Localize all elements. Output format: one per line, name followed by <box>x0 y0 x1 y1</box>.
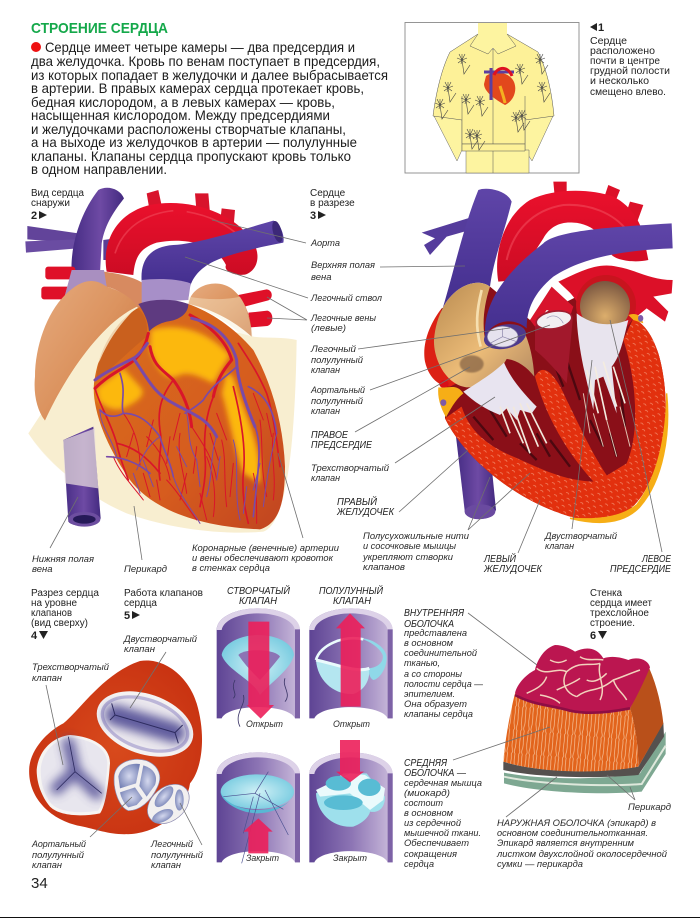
coronary veins <box>95 318 277 523</box>
text: inner layer: клапаны сердца <box>404 709 473 720</box>
labels of the heart figures: ПРЕДСЕРДИЕ <box>610 564 671 575</box>
caption 1: смещено влево. <box>590 87 666 98</box>
labels of figure 4: полулунный <box>32 850 85 861</box>
labels of the heart figures: вена <box>32 564 53 575</box>
labels of the heart figures: Трехстворчатый <box>311 463 390 474</box>
labels of the heart figures: Легочный ствол <box>310 293 383 304</box>
labels of the heart figures: Легочный <box>310 344 357 355</box>
yellow fat at left atrium <box>628 314 643 323</box>
labels of figure 4: клапан <box>124 644 156 655</box>
pulmonary trunk <box>141 220 284 303</box>
text: outer layer: сумки — перикарда <box>497 859 583 870</box>
intro text block: бедная кислородом, а в левых камерах — кровь, <box>31 94 335 110</box>
labels of the heart figures: Перикард <box>124 564 167 575</box>
figure 6: heart wall layers <box>503 645 666 793</box>
title: СТРОЕНИЕ СЕРДЦА <box>31 20 168 37</box>
superior vena cava <box>25 188 124 273</box>
labels of the heart figures: Аорта <box>310 238 340 249</box>
labels of the heart figures: ЖЕЛУДОЧЕК <box>336 507 395 518</box>
blood flow arrow down <box>247 622 274 719</box>
caption 6: трехслойное <box>590 608 649 619</box>
mini heart <box>484 68 515 105</box>
caption 4: Разрез сердца <box>31 588 99 599</box>
labels of figure 5: Открыт <box>333 719 370 730</box>
figure 3: heart in section <box>422 182 673 522</box>
labels of the heart figures: ЛЕВОЕ <box>641 554 671 565</box>
labels of the heart figures <box>32 238 671 575</box>
caption 2: 2 <box>31 210 37 222</box>
figure 2: heart outside view <box>25 188 297 533</box>
caption 4: (вид сверху) <box>31 618 88 629</box>
text: middle layer: Обеспечивает <box>404 838 469 849</box>
intro text block: в одном направлении. <box>31 161 167 177</box>
labels of the heart figures: Верхняя полая <box>311 260 375 271</box>
atrioventricular valve closed <box>217 752 300 863</box>
red bullet <box>31 42 41 52</box>
upper veins branches <box>422 217 473 255</box>
labels of the heart figures: Полусухожильные нити <box>363 531 470 542</box>
labels of the heart figures: Легочные вены <box>310 313 376 324</box>
epicardium gray layer <box>503 723 664 777</box>
caption 6: сердца имеет <box>590 598 652 609</box>
labels of figure 5 <box>227 584 384 864</box>
caption 1: 1 <box>598 22 604 34</box>
semilunar valve closed <box>309 740 393 862</box>
pericardium <box>28 307 297 533</box>
labels of the heart figures: ПРАВОЕ <box>311 430 348 441</box>
labels of the heart figures: Аортальный <box>310 385 366 396</box>
intro text block: клапаны. Клапаны сердца пропускают кровь только <box>31 148 351 164</box>
labels of the heart figures: (левые) <box>311 323 346 334</box>
caption 1: Сердце <box>590 36 627 47</box>
labels of the heart figures: ЖЕЛУДОЧЕК <box>483 564 543 575</box>
endocardium top <box>515 645 650 713</box>
yellow fat rim <box>570 393 668 522</box>
labels of the heart figures: клапан <box>311 365 341 376</box>
labels of figure 4: клапан <box>32 860 63 871</box>
pericardium translucent lobe <box>28 307 137 485</box>
caption 6 <box>590 588 652 642</box>
caption 2 <box>31 188 84 222</box>
text: middle layer: в основном <box>404 808 453 819</box>
labels of figure 4: клапан <box>151 860 182 871</box>
page number: 34 <box>31 875 48 892</box>
blood flow arrow up <box>243 818 273 853</box>
caption 1: почти в центре <box>590 56 660 67</box>
tricuspid valve leaflets <box>463 363 547 453</box>
blood flow arrow down <box>336 740 364 782</box>
left atrium <box>188 284 252 337</box>
labels of the heart figures: клапан <box>545 541 575 552</box>
labels of the heart figures: ПРАВЫЙ <box>337 495 378 508</box>
labels of the heart figures: ЛЕВЫЙ <box>483 552 517 565</box>
figure 5: valve operation diagrams <box>217 608 393 863</box>
labels of figure 5: Открыт <box>246 719 283 730</box>
myocardium front <box>503 693 638 771</box>
pericardium label: Перикард <box>628 802 671 813</box>
pericardium green layer <box>504 732 666 793</box>
labels of figure 5: СТВОРЧАТЫЙ <box>227 584 291 597</box>
labels of the heart figures: укрепляют створки <box>362 552 454 563</box>
intro text block: насыщенная кислородом. Между предсердиями <box>31 107 330 123</box>
labels of the heart figures: клапанов <box>363 562 405 573</box>
myocardium <box>29 660 202 834</box>
labels of the heart figures: и сосочковые мышцы <box>363 541 456 552</box>
labels of figure 5: КЛАПАН <box>239 596 278 607</box>
caption 5: сердца <box>124 598 157 609</box>
labels of figure 4 <box>31 634 204 871</box>
labels of the heart figures: клапан <box>311 406 341 417</box>
interventricular septum <box>535 370 610 485</box>
text: middle layer: (миокард) <box>404 788 450 799</box>
text: inner layer: тканью, <box>404 658 440 669</box>
text: inner layer: Она образует <box>404 699 467 710</box>
caption 2: Вид сердца <box>31 188 84 199</box>
labels of the heart figures: и вены обеспечивают кровоток <box>192 553 333 564</box>
myocardium side <box>630 668 663 767</box>
caption 4: на уровне <box>31 598 77 609</box>
pulmonary veins left side <box>41 267 75 299</box>
blood flow arrow up <box>336 613 365 707</box>
text: inner layer: а со стороны <box>404 669 462 680</box>
intro text block: в артерии. В правых камерах сердца протекает кровь, <box>31 80 364 96</box>
text: middle layer <box>404 758 482 870</box>
labels of the heart figures: Двустворчатый <box>544 531 618 542</box>
caption 4: 4 <box>31 630 38 642</box>
caption 1 <box>590 22 670 98</box>
caption 1: грудной полости <box>590 66 670 77</box>
pulmonary semilunar valve <box>482 320 528 353</box>
caption 4: клапанов <box>31 608 72 619</box>
caption 5: Работа клапанов <box>124 587 203 599</box>
caption 3: Сердце <box>310 188 346 199</box>
figure 4: valves plane section <box>29 660 202 834</box>
caption 1: и несколько <box>590 76 649 87</box>
text: outer layer: Эпикард является внутренним <box>497 838 634 849</box>
inferior vena cava <box>456 437 496 519</box>
labels of figure 5: Закрыт <box>333 853 367 864</box>
text: middle layer: сердца <box>404 859 434 870</box>
labels of figure 4: клапан <box>32 673 63 684</box>
labels of figure 4: Двустворчатый <box>123 634 198 645</box>
tricuspid valve <box>37 735 110 815</box>
labels of the heart figures: клапан <box>311 473 341 484</box>
semilunar valve open <box>309 608 393 718</box>
aortic semilunar valve <box>114 759 160 811</box>
labels of the heart figures: полулунный <box>311 396 364 407</box>
pulmonary trunk <box>485 223 673 337</box>
text: middle layer: СРЕДНЯЯ <box>404 758 447 769</box>
labels of the heart figures: вена <box>311 272 332 283</box>
caption 6: 6 <box>590 630 596 642</box>
labels of figure 5: ПОЛУЛУННЫЙ <box>319 584 384 597</box>
back atrial tissue <box>104 272 143 308</box>
heart body backing <box>429 287 666 520</box>
pulmonary semilunar valve <box>140 776 197 832</box>
labels of the heart figures: Коронарные (венечные) артерии <box>192 543 340 554</box>
atrioventricular valve open <box>217 608 300 727</box>
superior vena cava <box>443 189 512 308</box>
caption 5 <box>124 587 203 622</box>
right ventricle cavity texture <box>473 353 625 467</box>
caption 1: расположено <box>590 46 655 57</box>
caption 6: строение. <box>590 618 635 629</box>
pulmonary arterial tissue <box>535 313 573 383</box>
labels of the heart figures: Нижняя полая <box>32 554 94 565</box>
ventricles <box>94 301 285 529</box>
labels of figure 4: Трехстворчатый <box>32 662 110 673</box>
text: inner layer: эпителием. <box>404 689 455 700</box>
labels of the heart figures: ПРЕДСЕРДИЕ <box>311 440 372 451</box>
text: middle layer: сердечная мышца <box>404 778 482 789</box>
text: middle layer: из сердечной <box>404 818 462 829</box>
text: middle layer: мышечной ткани. <box>404 828 481 839</box>
text: outer layer: НАРУЖНАЯ ОБОЛОЧКА (эпикард) в <box>497 818 656 829</box>
coronary arteries <box>95 315 280 523</box>
intro text block <box>31 39 388 177</box>
text: middle layer: сокращения <box>404 849 457 860</box>
text: inner layer: ВНУТРЕННЯЯ <box>404 608 464 619</box>
left atrium and pulmonary veins <box>558 265 673 335</box>
caption 3: в разрезе <box>310 198 355 209</box>
leader lines <box>46 220 662 845</box>
intro text block: а на выходе из желудочков в артерии — полулунные <box>31 134 357 150</box>
right wall red <box>424 308 463 387</box>
labels of figure 5: КЛАПАН <box>333 596 372 607</box>
bicuspid valve <box>88 679 202 769</box>
labels of figure 4: Легочный <box>150 839 194 850</box>
intro text block: из которых попадает в желудочки и далее выбрасывается <box>31 67 388 83</box>
caption 2: снаружи <box>31 198 70 209</box>
text: inner layer: соединительной <box>404 648 478 659</box>
caption 3: 3 <box>310 210 316 222</box>
text: outer layer: листком двухслойной околосердечной <box>496 849 668 860</box>
text: outer layer <box>496 818 668 870</box>
right atrium <box>434 283 534 387</box>
caption 5: 5 <box>124 610 130 622</box>
intro text block: Сердце имеет четыре камеры — два предсердия и <box>45 39 355 55</box>
figure 1: man in shirt with heart <box>405 22 579 173</box>
labels of figure 4: Аортальный <box>31 839 87 850</box>
pulmonary veins right side <box>238 289 272 327</box>
text: inner layer: в основном <box>404 638 453 649</box>
caption 6: Стенка <box>590 588 622 599</box>
right atrium <box>35 272 137 421</box>
text: middle layer: состоит <box>404 798 443 809</box>
text: inner layer <box>404 608 483 720</box>
aortic semilunar valve <box>535 308 573 332</box>
caption 3 <box>310 188 355 222</box>
yellow fat near atrium <box>438 387 463 417</box>
inferior vena cava <box>63 427 101 527</box>
text: inner layer: полости сердца — <box>404 679 483 690</box>
labels of figure 4: полулунный <box>151 850 204 861</box>
text: outer layer: основном соединительнотканная. <box>497 828 648 839</box>
aortic arch <box>106 190 257 275</box>
intro text block: и желудочками расположены створчатые клапаны, <box>31 121 346 137</box>
myocardium outer wall <box>445 318 666 520</box>
text: inner layer: представлена <box>404 628 467 639</box>
labels of the heart figures: в стенках сердца <box>192 563 270 574</box>
text: middle layer: ОБОЛОЧКА — <box>404 768 467 779</box>
yellow fat patches <box>97 327 260 483</box>
aortic arch <box>497 182 648 282</box>
intro text block: два желудочка. Кровь по венам поступает в предсердия, <box>31 53 380 69</box>
labels of figure 5: Закрыт <box>246 853 279 864</box>
text: inner layer: ОБОЛОЧКА <box>404 619 454 630</box>
caption 4 <box>31 588 99 642</box>
labels of the heart figures: полулунный <box>311 355 364 366</box>
mitral valve leaflets <box>577 313 630 457</box>
